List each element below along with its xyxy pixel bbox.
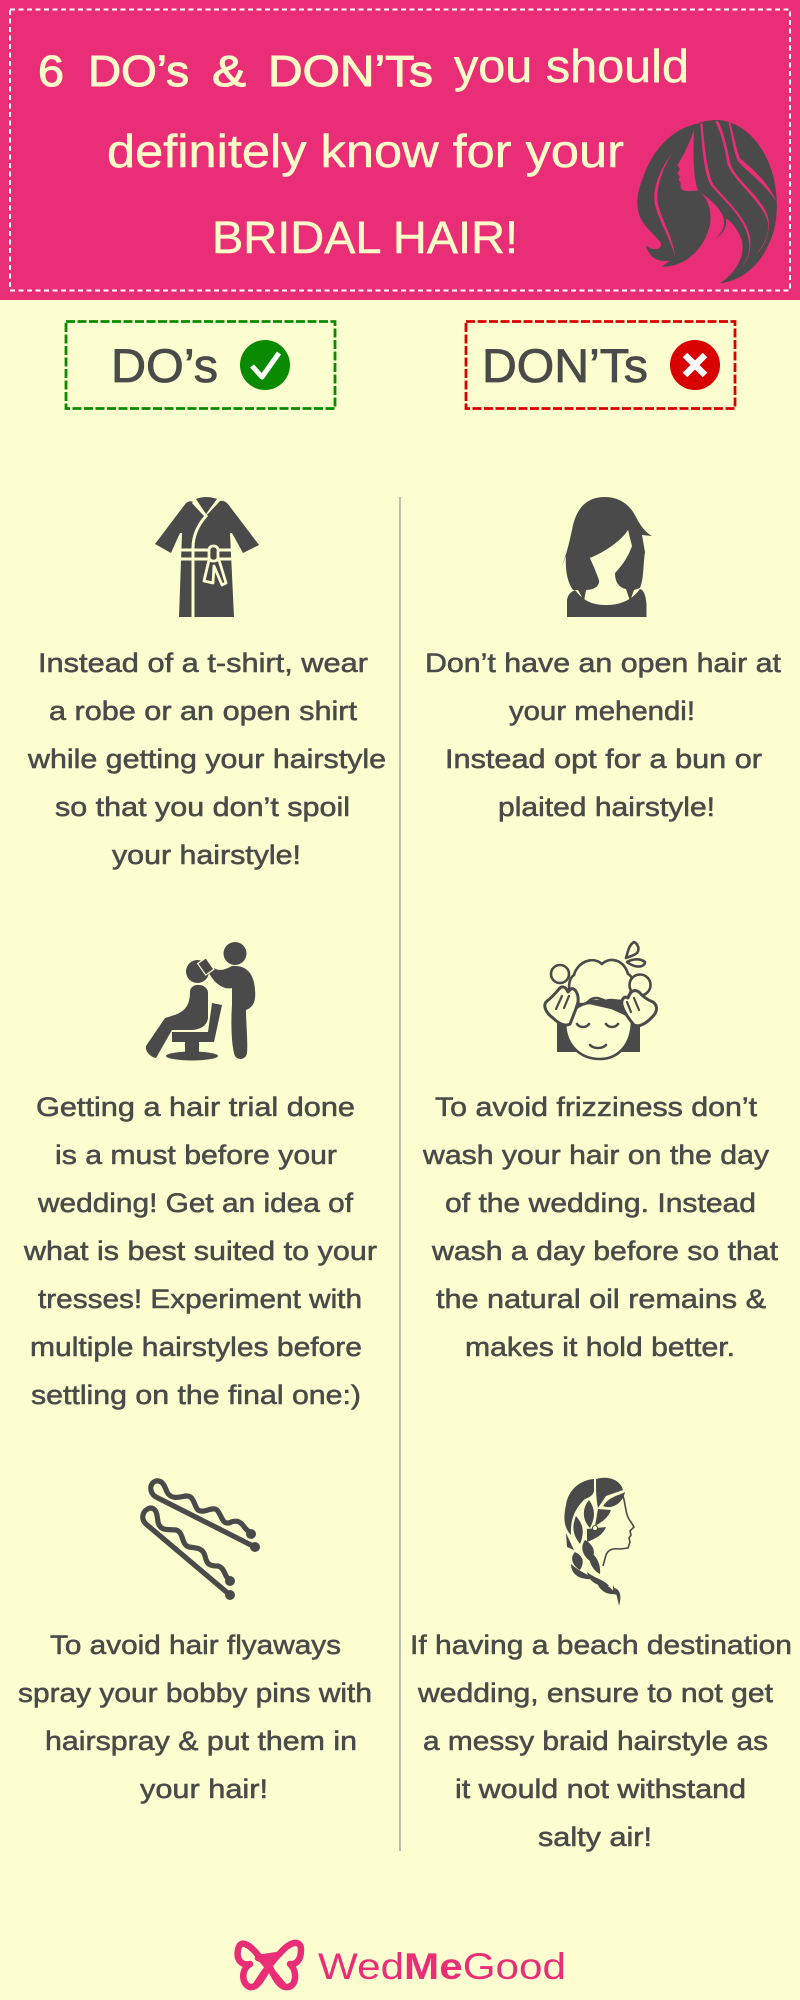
icon: bobby pins	[143, 1481, 260, 1600]
icon: robe	[155, 497, 259, 617]
panel: DON'Ts heading	[466, 322, 735, 408]
text: do 1: a robe or an open shirt	[49, 696, 358, 726]
icon: red cross	[670, 340, 720, 390]
title: &	[212, 47, 246, 96]
text: don't 3: salty air!	[538, 1822, 652, 1852]
text: don't 3: wedding, ensure to not get	[417, 1678, 774, 1708]
title: you should	[454, 40, 689, 92]
text: don't 2: of the wedding. Instead	[445, 1188, 756, 1218]
text: do 3: hairspray & put them in	[45, 1726, 357, 1756]
text: don't 1: Don’t have an open hair at	[425, 648, 782, 678]
text: don't 3: a messy braid hairstyle as	[423, 1726, 768, 1756]
text: do 2: Getting a hair trial done	[36, 1092, 355, 1122]
icon: hair stylist and client	[146, 942, 255, 1060]
text: don't 3	[410, 1630, 792, 1852]
text: don't 3: it would not withstand	[455, 1774, 746, 1804]
text: do 1: while getting your hairstyle	[27, 744, 386, 774]
panel: DO's heading	[66, 322, 335, 408]
icon: woman hair silhouette	[637, 120, 777, 283]
text: don't 2: To avoid frizziness don’t	[435, 1092, 758, 1122]
text: don't 1: Instead opt for a bun or	[445, 744, 762, 774]
title: DO’s	[88, 47, 189, 96]
text: do 1	[27, 648, 386, 870]
text: do 1: so that you don’t spoil	[55, 792, 350, 822]
text: do 2: is a must before your	[55, 1140, 337, 1170]
icon: butterfly hearts logo	[238, 1943, 301, 1987]
text: do 3	[18, 1630, 372, 1804]
text: do 3: spray your bobby pins with	[18, 1678, 372, 1708]
text: don't 1: plaited hairstyle!	[498, 792, 715, 822]
text: do 2: multiple hairstyles before	[30, 1332, 362, 1362]
title: definitely know for your	[107, 125, 624, 177]
icon: braid profile	[564, 1478, 634, 1606]
title: DON’Ts	[268, 47, 433, 96]
icon: shampooing head	[545, 942, 657, 1059]
text: do 2: what is best suited to your	[23, 1236, 377, 1266]
text: do 2: wedding! Get an idea of	[37, 1188, 354, 1218]
text: don't 2: wash a day before so that	[431, 1236, 779, 1266]
text: don't 1: your mehendi!	[509, 696, 695, 726]
title: BRIDAL HAIR!	[212, 212, 518, 263]
text: do 2: tresses! Experiment with	[38, 1284, 362, 1314]
wordmark: Wed MeGood	[318, 1946, 566, 1987]
text: do 1: your hairstyle!	[112, 840, 301, 870]
icon: woman with open hair	[562, 497, 652, 617]
text: do 3: To avoid hair flyaways	[50, 1630, 341, 1660]
text: don't 2	[422, 1092, 779, 1362]
text: do 3: your hair!	[140, 1774, 268, 1804]
title: 6	[38, 47, 64, 96]
header banner	[0, 0, 800, 300]
text: do 2: settling on the final one:)	[31, 1380, 361, 1410]
text: don't 3: If having a beach destination	[410, 1630, 792, 1660]
logo: WedMeGood	[238, 1943, 566, 1987]
panel: DO's heading: DO’s	[111, 339, 218, 392]
text: don't 2: makes it hold better.	[465, 1332, 735, 1362]
text: don't 1	[425, 648, 782, 822]
text: don't 2: the natural oil remains &	[436, 1284, 766, 1314]
title	[38, 40, 689, 263]
panel: DON'Ts heading: DON’Ts	[482, 339, 648, 392]
text: don't 2: wash your hair on the day	[422, 1140, 770, 1170]
icon: green check	[240, 340, 290, 390]
text: do 1: Instead of a t-shirt, wear	[38, 648, 368, 678]
column divider	[399, 497, 401, 1851]
text: do 2	[23, 1092, 377, 1410]
